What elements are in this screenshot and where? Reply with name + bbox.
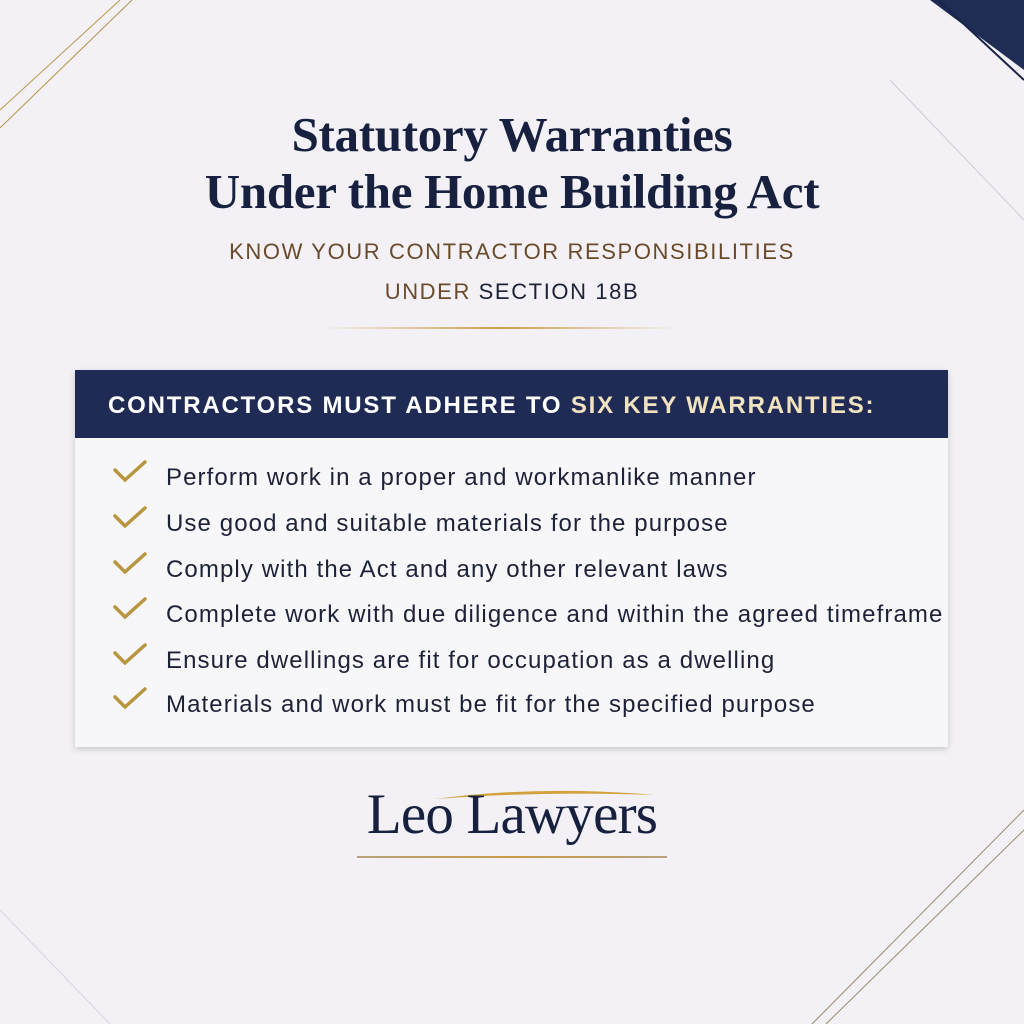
subtitle: KNOW YOUR CONTRACTOR RESPONSIBILITIES	[229, 239, 795, 264]
logo: Leo Lawyers: Leo Lawyers	[367, 783, 657, 846]
subtitle	[229, 239, 795, 304]
panel: warranties	[75, 370, 948, 747]
title: Under the Home Building Act	[205, 164, 819, 219]
title	[205, 107, 820, 219]
panel: warranties: Materials and work must be fit for the specified purpose	[166, 691, 816, 718]
title: Statutory Warranties	[292, 107, 732, 162]
panel: warranties: Complete work with due diligence and within the agreed timeframe	[166, 601, 943, 628]
panel header	[75, 370, 948, 438]
panel: warranties: Ensure dwellings are fit for occupation as a dwelling	[166, 647, 775, 674]
subtitle: UNDER SECTION 18B	[385, 279, 639, 304]
panel: warranties: Comply with the Act and any other relevant laws	[166, 556, 729, 583]
panel: warranties: Use good and suitable materials for the purpose	[166, 510, 729, 537]
checklist	[113, 460, 147, 710]
panel header: CONTRACTORS MUST ADHERE TO SIX KEY WARRANTIES:	[108, 392, 875, 419]
gold divider	[320, 327, 680, 329]
panel: warranties: Perform work in a proper and workmanlike manner	[166, 464, 757, 491]
